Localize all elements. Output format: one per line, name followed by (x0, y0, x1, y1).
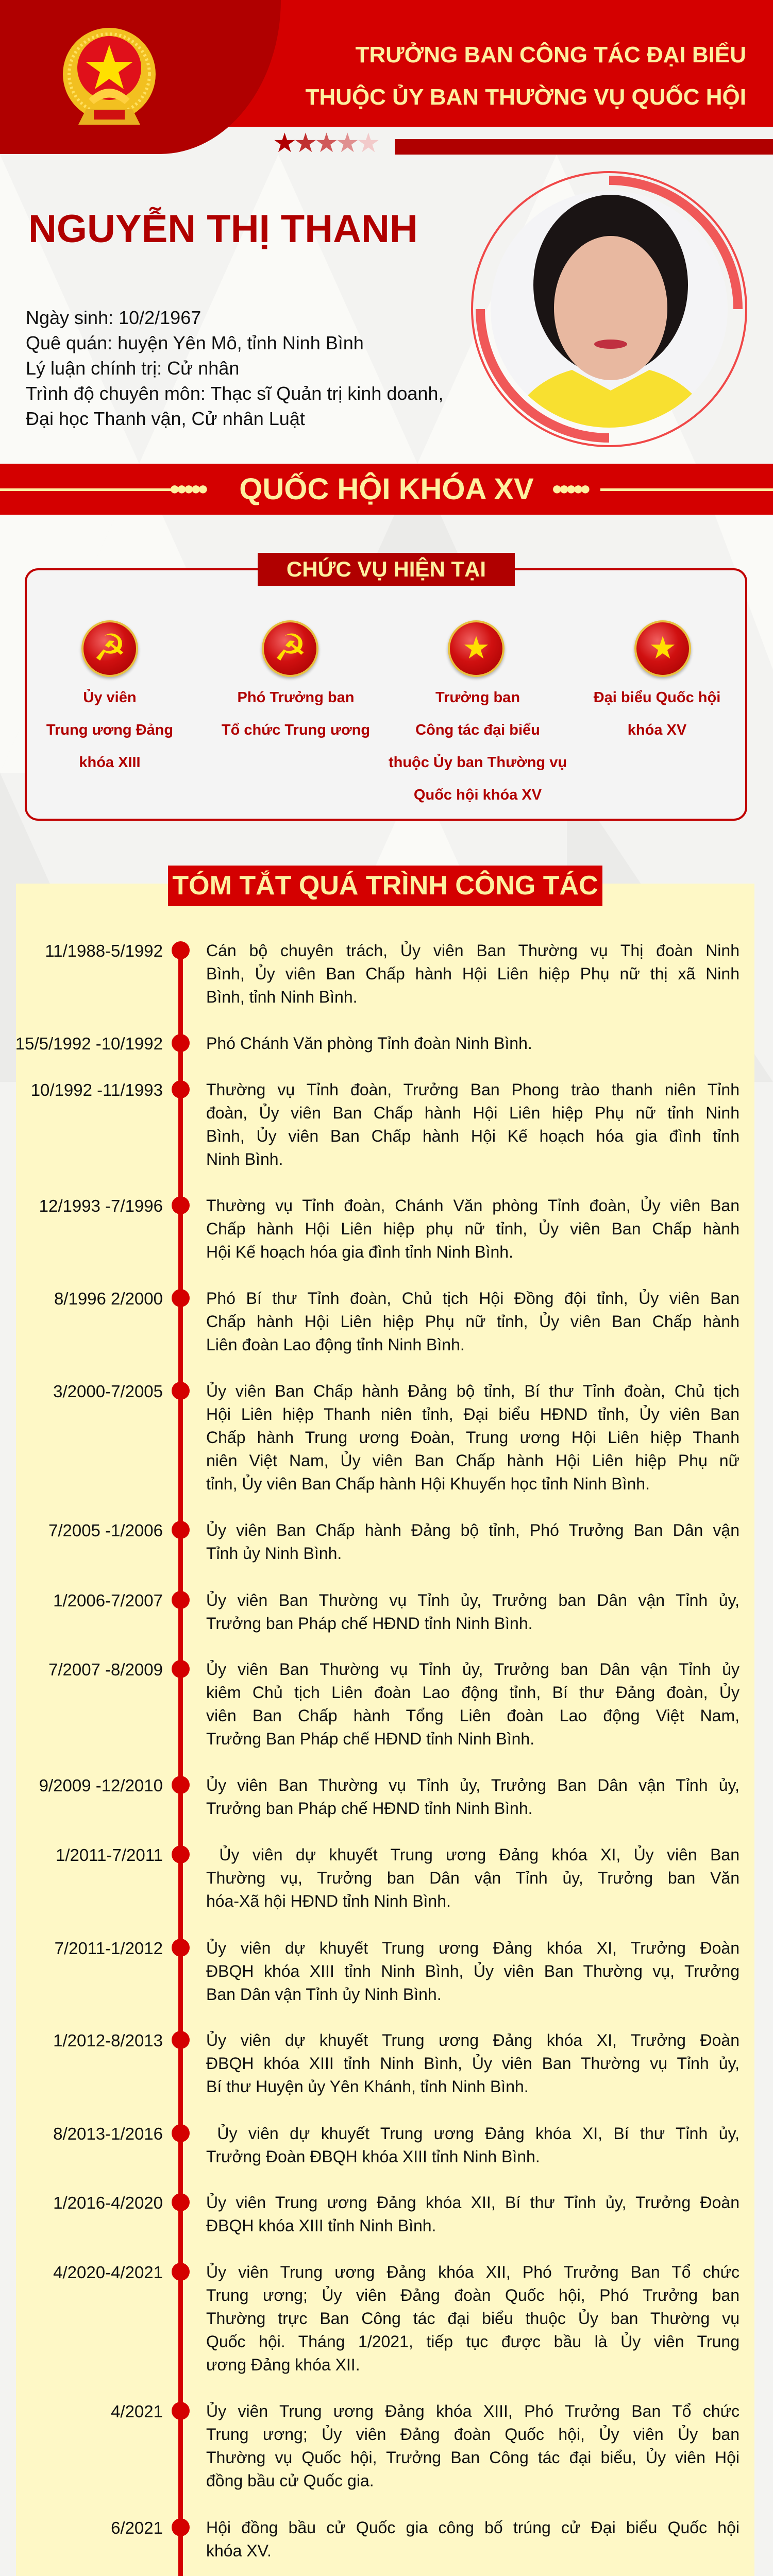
position text 2 (222, 689, 370, 738)
text: Bí thư Huyện ủy Yên Khánh, tỉnh Ninh Bình. (206, 2077, 529, 2096)
entry 9: Ủy viên Ban Thường vụ Tỉnh ủy, Trưởng ban Dân vận Tỉnh ủy (206, 1660, 740, 1679)
entry 5: Phó Bí thư Tỉnh đoàn, Chủ tịch Hội Đồng đội tỉnh, Ủy viên Ban (206, 1289, 740, 1308)
text: đồng bầu cử Quốc gia. (206, 2471, 374, 2490)
position text 1 (46, 689, 173, 771)
entry 11 (56, 1845, 740, 1910)
entry 7: 7/2005 -1/2006 (48, 1521, 163, 1540)
entry 13 (53, 2031, 740, 2096)
text: tỉnh, Ủy viên Ban Chấp hành Hội Khuyến học tỉnh Ninh Bình. (206, 1475, 650, 1493)
text: Trưởng Ban Pháp chế HĐND tỉnh Ninh Bình. (206, 1730, 534, 1748)
text: niên Việt Nam, Ủy viên Ban Chấp hành Hội Liên hiệp Phụ nữ (206, 1451, 740, 1470)
entry 1: 11/1988-5/1992 (45, 941, 163, 960)
text: Ban Dân vận Tỉnh ủy Ninh Bình. (206, 1985, 442, 2004)
text: Ninh Bình. (206, 1150, 283, 1168)
text: Trưởng ban Pháp chế HĐND tỉnh Ninh Bình. (206, 1614, 533, 1633)
icon: party emblem 2 (262, 620, 318, 677)
entry 4: 12/1993 -7/1996 (39, 1196, 163, 1215)
banner: Quốc hội khóa XV: QUỐC HỘI KHÓA XV (239, 472, 534, 506)
icon: party emblem 2: ☭ (274, 628, 307, 669)
entry 16: 4/2020-4/2021 (53, 2263, 163, 2282)
entry 18 (111, 2518, 740, 2560)
text: Thường trực Ban Công tác đại biểu thuộc Ủy ban Thường vụ (206, 2309, 740, 2328)
text: Trung ương; Ủy viên Đảng đoàn Quốc hội, Phó Trưởng ban (206, 2286, 740, 2304)
banner: Quốc hội khóa XV (0, 464, 773, 515)
text: ương Đảng khóa XII. (206, 2355, 360, 2374)
title (306, 42, 746, 110)
text: Thường vụ, Trưởng ban Dân vận Tỉnh ủy, Trưởng ban Văn (206, 1869, 740, 1887)
position text 3: Quốc hội khóa XV (414, 787, 542, 803)
text: Bình, tỉnh Ninh Bình. (206, 988, 358, 1006)
position text 2: Tổ chức Trung ương (222, 722, 370, 738)
entry 17: Ủy viên Trung ương Đảng khóa XIII, Phó Trưởng Ban Tổ chức (206, 2402, 740, 2420)
entry 12 (55, 1938, 740, 2004)
entry 5: 8/1996 2/2000 (54, 1289, 163, 1308)
text: Thường vụ Quốc hội, Trưởng Ban Công tác đại biểu, Ủy viên Hội (206, 2448, 740, 2467)
text: Liên đoàn Lao động tỉnh Ninh Bình. (206, 1335, 465, 1354)
entry 14: Ủy viên dự khuyết Trung ương Đảng khóa XI, Bí thư Tỉnh ủy, (217, 2124, 740, 2143)
position text 1: Ủy viên (83, 689, 137, 706)
text: hóa-Xã hội HĐND tỉnh Ninh Bình. (206, 1892, 451, 1910)
icon: national emblem 1: ★ (462, 631, 490, 665)
entry 13: 1/2012-8/2013 (53, 2031, 163, 2050)
entry 16 (53, 2263, 740, 2374)
entry 1: Cán bộ chuyên trách, Ủy viên Ban Thường vụ Thị đoàn Ninh (206, 941, 740, 960)
position text 3: Công tác đại biểu (415, 722, 540, 738)
header red band (0, 0, 773, 127)
entry 15 (53, 2193, 740, 2235)
text: Trung ương; Ủy viên Đảng đoàn Quốc hội, Ủy viên Ủy ban (206, 2425, 740, 2444)
timeline heading: TÓM TẮT QUÁ TRÌNH CÔNG TÁC (172, 871, 598, 901)
personal info: Đại học Thanh vận, Cử nhân Luật (26, 408, 305, 429)
icon: party emblem 1 (81, 620, 138, 677)
entry 15: 1/2016-4/2020 (53, 2193, 163, 2212)
timeline panel (16, 884, 754, 2576)
entry 4 (39, 1196, 740, 1261)
icon: national emblem 1 (448, 620, 505, 677)
panel heading (258, 553, 515, 586)
text: viên Ban Chấp hành Tổng Liên đoàn Lao động Việt Nam, (206, 1706, 740, 1725)
personal info: Trình độ chuyên môn: Thạc sĩ Quản trị kinh doanh, (26, 383, 443, 404)
entry 14: 8/2013-1/2016 (53, 2124, 163, 2143)
position text 4 (594, 689, 720, 738)
icon: national emblem (63, 28, 156, 125)
icon: party emblem 1: ☭ (93, 628, 126, 669)
banner: Quốc hội khóa XV: ●●●●● (551, 478, 587, 499)
text: Hội Kế hoạch hóa gia đình tỉnh Ninh Bình. (206, 1243, 513, 1261)
title: THUỘC ỦY BAN THƯỜNG VỤ QUỐC HỘI (306, 84, 746, 110)
entry 2: Phó Chánh Văn phòng Tỉnh đoàn Ninh Bình. (206, 1034, 532, 1053)
entry 1 (45, 941, 740, 1006)
entry 16: Ủy viên Trung ương Đảng khóa XII, Phó Trưởng Ban Tổ chức (206, 2263, 740, 2281)
position text 3 (389, 689, 567, 803)
entry 3: Thường vụ Tỉnh đoàn, Trưởng Ban Phong trào thanh niên Tỉnh (206, 1080, 740, 1099)
entry 10 (39, 1775, 740, 1818)
panel: current positions (25, 568, 747, 821)
entry 11: Ủy viên dự khuyết Trung ương Đảng khóa XI, Ủy viên Ban (219, 1845, 740, 1864)
position text 4: khóa XV (628, 722, 686, 738)
text: Bình, Ủy viên Ban Chấp hành Hội Kế hoạch hóa gia đình tỉnh (206, 1127, 740, 1145)
entry 6: 3/2000-7/2005 (53, 1382, 163, 1401)
position text 3: thuộc Ủy ban Thường vụ (389, 754, 567, 771)
timeline line (178, 948, 183, 2576)
entry 9 (48, 1660, 740, 1748)
entry 11: 1/2011-7/2011 (56, 1845, 163, 1865)
text: Bình, Ủy viên Ban Chấp hành Hội Liên hiệp Phụ nữ thị xã Ninh (206, 964, 740, 983)
text: ĐBQH khóa XIII tỉnh Ninh Bình, Ủy viên Ban Thường vụ Tỉnh ủy, (206, 2054, 740, 2073)
text: Chấp hành Hội Liên hiệp Phụ nữ tỉnh, Ủy viên Ban Chấp hành (206, 1312, 740, 1331)
entry 3 (31, 1080, 740, 1168)
entry 10: 9/2009 -12/2010 (39, 1776, 163, 1795)
personal info (26, 307, 443, 429)
portrait photo (471, 171, 747, 447)
entry 18: 6/2021 (111, 2518, 163, 2537)
name: NGUYỄN THỊ THANH (28, 207, 418, 251)
text: Chấp hành Trung ương Đoàn, Trung ương Hội Liên hiệp Thanh (206, 1428, 740, 1447)
entry 12: 7/2011-1/2012 (55, 1939, 163, 1958)
entry 8: Ủy viên Ban Thường vụ Tỉnh ủy, Trưởng ban Dân vận Tỉnh ủy, (206, 1591, 740, 1609)
text: khóa XV. (206, 2541, 272, 2560)
banner: Quốc hội khóa XV: ●●●●● (169, 478, 205, 499)
text: ĐBQH khóa XIII tỉnh Ninh Bình, Ủy viên Ban Thường vụ, Trưởng (206, 1962, 740, 1980)
text: Tỉnh ủy Ninh Bình. (206, 1544, 342, 1563)
position text 1: Trung ương Đảng (46, 722, 173, 738)
text: đoàn, Ủy viên Ban Chấp hành Hội Liên hiệp Phụ nữ tỉnh Ninh (206, 1104, 740, 1122)
text: Hội Liên hiệp Thanh niên tỉnh, Đại biểu HĐND tỉnh, Ủy viên Ban (206, 1405, 740, 1423)
entry 13: Ủy viên dự khuyết Trung ương Đảng khóa XI, Trưởng Đoàn (206, 2031, 740, 2049)
entry 4: Thường vụ Tỉnh đoàn, Chánh Văn phòng Tỉnh đoàn, Ủy viên Ban (206, 1196, 740, 1215)
position text 1: khóa XIII (79, 754, 141, 771)
position text 4: Đại biểu Quốc hội (594, 689, 720, 706)
entry 7 (48, 1521, 740, 1563)
text: Quốc hội. Tháng 1/2021, tiếp tục được bầu là Ủy viên Trung (206, 2332, 740, 2351)
text: Trưởng Đoàn ĐBQH khóa XIII tỉnh Ninh Bình. (206, 2147, 540, 2166)
personal info: Quê quán: huyện Yên Mô, tỉnh Ninh Bình (26, 332, 364, 353)
entry 17: 4/2021 (111, 2402, 163, 2421)
entry 2: 15/5/1992 -10/1992 (15, 1034, 163, 1053)
entry 17 (111, 2402, 740, 2490)
entry 5 (54, 1289, 740, 1354)
text: kiêm Chủ tịch Liên đoàn Lao động tỉnh, Bí thư Đảng đoàn, Ủy (206, 1683, 740, 1702)
panel heading: CHỨC VỤ HIỆN TẠI (287, 557, 486, 581)
icon: national emblem 2: ★ (649, 631, 677, 665)
position text 2: Phó Trưởng ban (238, 689, 354, 706)
entry 8 (53, 1591, 740, 1633)
entry 10: Ủy viên Ban Thường vụ Tỉnh ủy, Trưởng Ban Dân vận Tỉnh ủy, (206, 1776, 740, 1794)
entry 7: Ủy viên Ban Chấp hành Đảng bộ tỉnh, Phó Trưởng Ban Dân vận (206, 1521, 740, 1539)
entry 6 (53, 1382, 740, 1493)
personal info: Ngày sinh: 10/2/1967 (26, 307, 201, 328)
icon: national emblem 2 (634, 620, 691, 677)
position text 3: Trưởng ban (435, 689, 520, 706)
entry 6: Ủy viên Ban Chấp hành Đảng bộ tỉnh, Bí thư Tỉnh đoàn, Chủ tịch (206, 1382, 740, 1400)
text: Trưởng ban Pháp chế HĐND tỉnh Ninh Bình. (206, 1799, 533, 1818)
entry 2 (15, 1034, 532, 1053)
personal info: Lý luận chính trị: Cử nhân (26, 358, 239, 379)
entry 8: 1/2006-7/2007 (53, 1591, 163, 1610)
header bar (395, 139, 773, 155)
header dark red shape (0, 0, 281, 154)
title: TRƯỞNG BAN CÔNG TÁC ĐẠI BIỂU (356, 42, 746, 67)
text: Chấp hành Hội Liên hiệp phụ nữ tỉnh, Ủy viên Ban Chấp hành (206, 1219, 740, 1238)
entry 14 (53, 2124, 740, 2166)
entry 3: 10/1992 -11/1993 (31, 1080, 163, 1099)
entry 12: Ủy viên dự khuyết Trung ương Đảng khóa XI, Trưởng Đoàn (206, 1939, 740, 1957)
entry 15: Ủy viên Trung ương Đảng khóa XII, Bí thư Tỉnh ủy, Trưởng Đoàn (206, 2193, 740, 2212)
entry 18: Hội đồng bầu cử Quốc gia công bố trúng cử Đại biểu Quốc hội (206, 2518, 740, 2537)
entry 9: 7/2007 -8/2009 (48, 1660, 163, 1679)
text: ĐBQH khóa XIII tỉnh Ninh Bình. (206, 2216, 436, 2235)
